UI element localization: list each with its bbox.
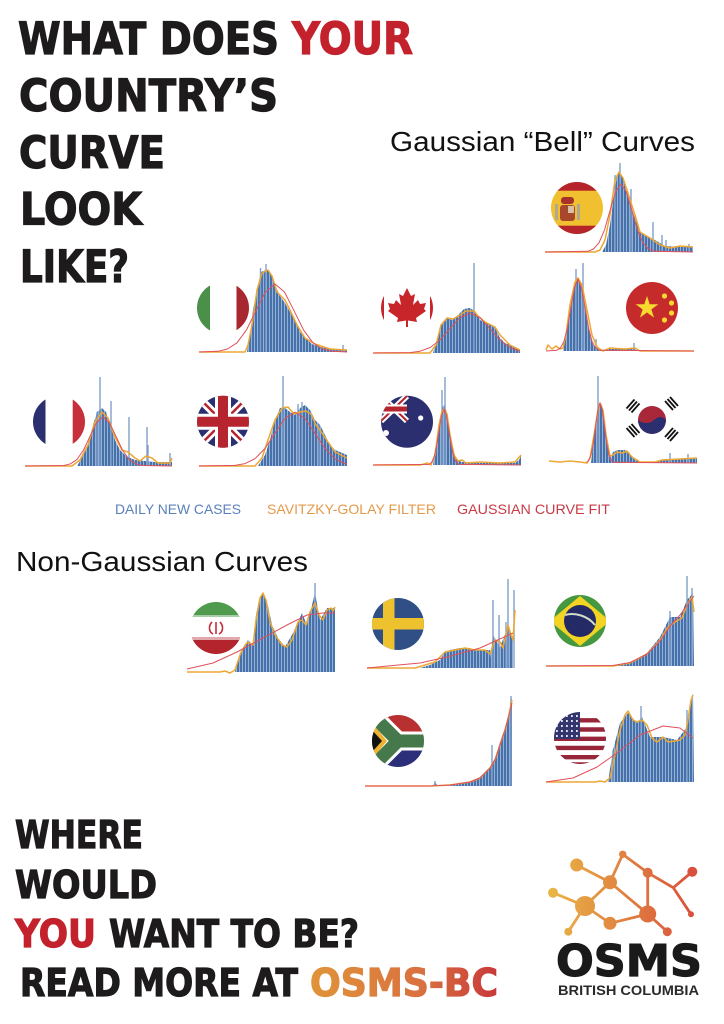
panel: Brazil: [546, 576, 694, 666]
icon: flag of South Korea: [626, 397, 678, 441]
panel: South Korea: [549, 376, 697, 463]
panel: Spain: [545, 163, 693, 252]
closing text: YOU: [14, 912, 96, 957]
closing text: OSMS-BC: [310, 961, 498, 1006]
panel: Australia: [373, 377, 521, 465]
title: LOOK: [20, 184, 143, 236]
panel: Iran: [187, 583, 335, 673]
title: COUNTRY’S: [19, 71, 278, 122]
icon: flag of Italy: [197, 286, 249, 330]
icon: flag of Sweden: [372, 598, 424, 650]
icon: flag of Australia: [381, 395, 433, 449]
title: LIKE?: [20, 242, 129, 293]
icon: flag of China: [626, 282, 678, 334]
icon: flag of Brazil: [554, 595, 606, 647]
panel: United Kingdom: [197, 376, 347, 466]
title: WHAT DOES: [18, 14, 279, 65]
panel: Italy: [197, 264, 347, 352]
closing text: WOULD: [15, 863, 157, 908]
icon: flag of France: [33, 400, 85, 444]
closing text: READ MORE AT: [20, 961, 299, 1006]
panel: South Africa: [365, 696, 512, 786]
panel: France: [25, 377, 172, 466]
logo: OSMS British Columbia: OSMS: [556, 936, 702, 987]
legend: GAUSSIAN CURVE FIT: [457, 501, 610, 517]
icon: network graph: [548, 851, 697, 936]
logo: OSMS British Columbia: BRITISH COLUMBIA: [558, 982, 699, 998]
legend: DAILY NEW CASES: [115, 501, 241, 517]
closing text: [14, 813, 498, 1006]
heading: Non-Gaussian curves: Non-Gaussian Curves: [16, 546, 308, 577]
icon: flag of Iran: [190, 602, 242, 654]
icon: flag of Canada: [381, 288, 433, 327]
panel: Canada: [373, 263, 520, 353]
panel: Sweden: [367, 579, 515, 668]
logo: OSMS British Columbia: [548, 851, 702, 998]
closing text: WANT TO BE?: [109, 912, 359, 957]
icon: flag of South Africa: [372, 715, 424, 767]
panel: China: [546, 263, 694, 351]
heading: Gaussian curves: Gaussian “Bell” Curves: [390, 126, 695, 157]
closing text: WHERE: [15, 813, 143, 858]
title: [18, 14, 413, 293]
icon: flag of United Kingdom: [197, 395, 249, 449]
legend: [115, 501, 610, 517]
legend: SAVITZKY-GOLAY FILTER: [267, 501, 436, 517]
panel: United States: [546, 693, 694, 782]
title: YOUR: [291, 14, 413, 65]
icon: flag of Spain: [551, 182, 603, 234]
icon: flag of United States: [554, 712, 606, 764]
title: CURVE: [19, 128, 165, 179]
